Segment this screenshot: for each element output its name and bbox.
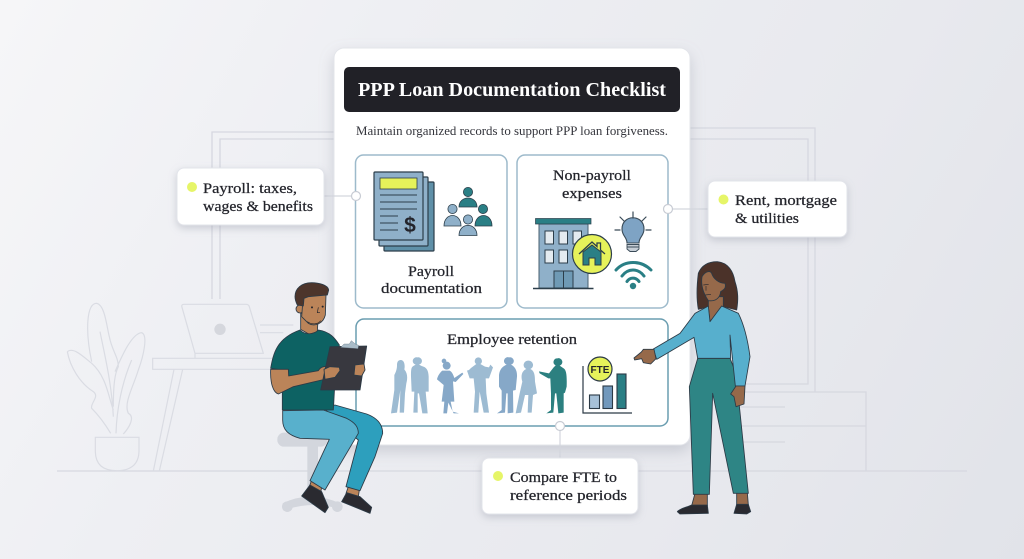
stool [277,433,343,512]
background office line art [57,128,967,471]
floor line [57,470,967,472]
neck and shirt [301,313,318,334]
callout: FTE [482,458,638,514]
hair [697,262,738,310]
standing woman pointing [634,262,751,514]
figure 1 [391,360,407,413]
panel label: documentation [381,281,483,297]
legs [309,480,359,497]
panel label: Employee retention [447,332,578,348]
callout: payroll [177,168,324,225]
callout: rent: & utilities [735,211,799,227]
figure 4 [467,357,493,413]
callout: payroll: wages & benefits [203,199,313,215]
panel label: Non-payroll [553,168,631,184]
left arm [271,366,340,394]
icon: light bulb [615,212,651,252]
shoes [302,485,328,513]
blouse [653,306,750,386]
callout: FTE: Compare FTE to [510,470,617,486]
callout: rent: Rent, mortgage [735,193,837,209]
icon: wifi [616,262,651,289]
background plant [67,303,145,471]
icon: building with home badge [533,218,612,288]
figure 2 [411,357,429,413]
background desk and laptop [153,304,293,471]
subtitle: Maintain organized records to support PPP loan forgiveness. [356,123,668,138]
panel: employee retention [356,319,668,426]
icon: people group [444,187,492,236]
neck and face [708,297,723,322]
connector: FTE [556,422,564,458]
figure 6 [516,361,537,413]
employee silhouettes [391,357,567,413]
title bar: PPP Loan Documentation Checklist [358,79,666,101]
figure 5 [497,357,517,413]
connector: rent [664,204,708,214]
trousers [689,358,748,494]
connector: payroll [324,192,360,200]
hands [324,367,340,379]
resting hand [731,386,745,407]
window frame left [212,132,340,299]
seated man with clipboard [271,283,383,513]
figure 3 [437,359,463,413]
window frame right [685,128,815,392]
panel label: Payroll [408,264,454,280]
checklist card [334,48,690,445]
shoes and ankles [692,493,748,506]
callout: FTE: reference periods [510,488,627,504]
callout: payroll: Payroll: taxes, [203,181,297,197]
icon: payroll documents: $ [404,214,416,237]
FTE bar chart [583,357,632,413]
FTE badge: FTE [591,365,610,376]
title bar [344,67,680,112]
panel: non-payroll expenses [517,155,668,308]
cabinet [740,392,866,471]
clipboard [321,346,367,390]
pointing hand [634,349,656,364]
icon: payroll documents [374,172,434,251]
head [295,283,329,325]
panel label: expenses [562,186,622,202]
figure 7 [539,358,567,413]
panel: payroll documentation [356,155,507,308]
callout: rent [708,181,847,237]
